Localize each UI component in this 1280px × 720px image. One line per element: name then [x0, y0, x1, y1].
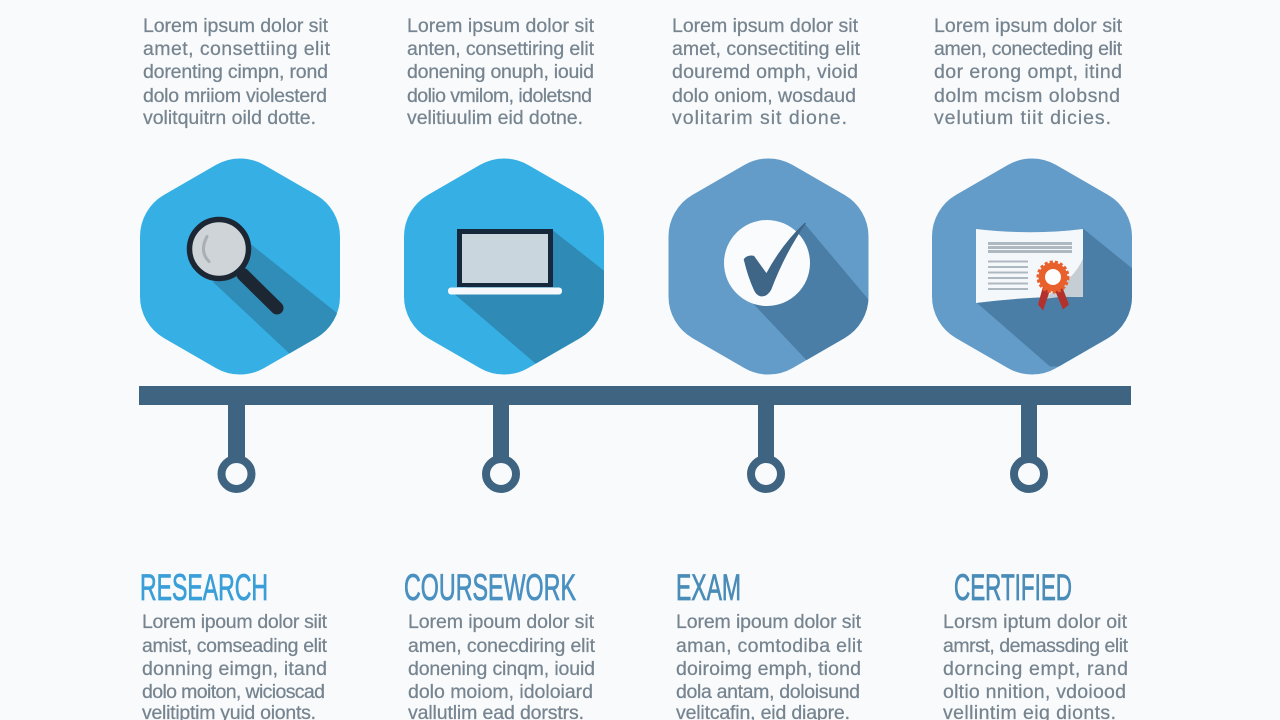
heading: research: RESEARCH	[140, 567, 268, 608]
text block: top column 3: amet, consectiting elit	[672, 38, 861, 60]
text block: exam description: Lorem ipoum dolor sit	[676, 611, 862, 633]
text block: research description: amist, comseading elit	[142, 635, 328, 657]
text block: certified description: dorncing empt, rand	[943, 658, 1128, 680]
text block: top column 4: amen, conecteding elit	[934, 38, 1123, 60]
text block: certified description: amrst, demassding elit	[943, 635, 1129, 657]
hexagon icon: laptop	[404, 158, 604, 374]
text block: top column 4	[934, 15, 1123, 129]
hexagon icon: certificate	[932, 158, 1132, 374]
milestone marker 3	[751, 405, 781, 489]
text block: top column 1: Lorem ipsum dolor sit	[143, 15, 329, 37]
hexagon icon: check mark	[668, 158, 868, 374]
text block: coursework description: Lorem ipoum dolor sit	[408, 611, 595, 633]
text block: exam description: aman, comtodiba elit	[676, 635, 863, 657]
text block: research description	[142, 611, 328, 720]
text block: certified description	[943, 611, 1129, 720]
ribbon seal	[1038, 262, 1069, 310]
text block: coursework description: donening cinqm, iouid	[408, 658, 595, 680]
text block: coursework description: amen, conecdiring elit	[408, 635, 596, 657]
text block: top column 3	[672, 15, 861, 129]
text block: exam description: doiroimg emph, tiond	[676, 658, 861, 680]
milestone marker 4	[1014, 405, 1044, 489]
text block: exam description	[676, 611, 863, 720]
text block: coursework description	[408, 611, 596, 720]
text block: top column 1: volitquitrn oild dotte.	[143, 107, 316, 129]
text block: top column 1: amet, consettiing elit	[143, 38, 331, 60]
text block: top column 4: velutium tiit dicies.	[934, 107, 1111, 129]
text block: top column 3: douremd omph, vioid	[672, 61, 858, 83]
text block: top column 2	[407, 15, 595, 129]
text block: exam description: dola antam, doloisund	[676, 681, 860, 703]
text block: research description: dolo moiton, wicioscad	[142, 681, 325, 703]
timeline bar	[139, 386, 1131, 405]
milestone marker 1	[222, 405, 252, 489]
text block: top column 1: dorenting cimpn, rond	[143, 61, 328, 83]
text block: top column 1	[143, 15, 331, 129]
text block: top column 4: dolm mcism olobsnd	[934, 85, 1120, 107]
text block: top column 2: dolio vmilom, idoletsnd	[407, 85, 592, 107]
heading: coursework: COURSEWORK	[404, 567, 576, 608]
heading: exam: EXAM	[676, 567, 741, 608]
text block: research description: Lorem ipoum dolor siit	[142, 611, 328, 633]
hexagon icon: magnifying glass	[140, 158, 340, 374]
milestone marker 2	[486, 405, 516, 489]
text block: research description: donning eimgn, itand	[142, 658, 327, 680]
text block: certified description: Lorsm iptum dolor oit	[943, 611, 1128, 633]
text block: top column 4: Lorem ipsum dolor sit	[934, 15, 1123, 37]
text block: top column 3: volitarim sit dione.	[672, 107, 847, 129]
text block: top column 1: dolo mriiom violesterd	[143, 85, 327, 107]
text block: top column 3: Lorem ipsum dolor sit	[672, 15, 859, 37]
text block: top column 2: Lorem ipsum dolor sit	[407, 15, 595, 37]
certificate paper	[976, 229, 1083, 303]
timeline	[139, 386, 1131, 489]
text block: top column 3: dolo oniom, wosdaud	[672, 85, 856, 107]
text block: top column 4: dor erong ompt, itind	[934, 61, 1122, 83]
text block: top column 2: anten, consettiring elit	[407, 38, 595, 60]
heading: certified: CERTIFIED	[954, 567, 1072, 608]
text block: top column 2: donening onuph, iouid	[407, 61, 594, 83]
text block: top column 2: velitiuulim eid dotne.	[407, 107, 583, 129]
text block: certified description: oltio nnition, vdoiood	[943, 681, 1126, 703]
text block: coursework description: dolo moiom, idoloiard	[408, 681, 593, 703]
